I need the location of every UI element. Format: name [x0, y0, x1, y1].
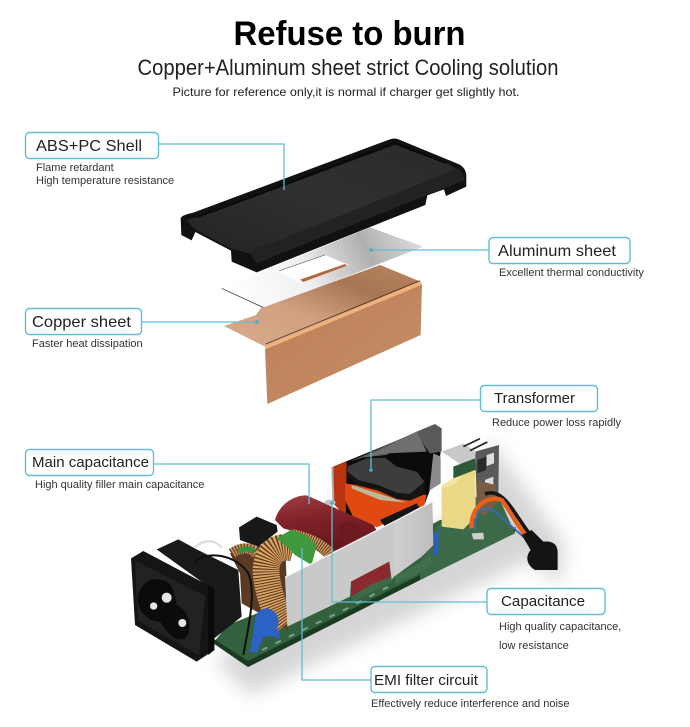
- callout: capacitance: low resistance: [499, 640, 569, 652]
- callout: EMI filter circuit: EMI filter circuit: [374, 672, 479, 689]
- socket body: [157, 539, 242, 638]
- cable strain relief: [522, 530, 558, 570]
- callout: ABS+PC shell: High temperature resistance: [36, 175, 174, 187]
- EMI coils and relay: [230, 517, 331, 630]
- small silver part: [472, 533, 484, 539]
- socket recess: [138, 579, 190, 640]
- callout: transformer: Transformer: [494, 390, 575, 407]
- yellow capacitor: [442, 458, 476, 529]
- callout: EMI filter circuit: [302, 548, 570, 710]
- charger circuit board: [131, 424, 565, 695]
- callout: capacitance: [330, 501, 621, 652]
- exploded cooling assembly: [181, 138, 466, 404]
- grey roof: [350, 424, 442, 491]
- callout: capacitance: High quality capacitance,: [499, 621, 621, 633]
- orange winding: [345, 483, 427, 527]
- disclaimer note: Picture for reference only,it is normal if charger get slightly hot.: [172, 85, 520, 99]
- callout: main capacitance: High quality filler main capacitance: [35, 479, 204, 491]
- callout: capacitance: Capacitance: [501, 593, 585, 610]
- transformer core cap: [347, 458, 425, 501]
- copper sheet: [224, 265, 422, 404]
- callout: aluminum sheet: [369, 238, 644, 279]
- pins: [150, 602, 157, 610]
- callout: copper sheet: Copper sheet: [32, 314, 132, 331]
- title: Refuse to burn: [234, 15, 466, 53]
- callout: transformer: Reduce power loss rapidly: [492, 417, 622, 429]
- wires: [472, 493, 532, 539]
- callout: aluminum sheet: Excellent thermal conductivity: [499, 267, 644, 279]
- board section behind wires: [420, 497, 515, 580]
- cut-out showing capacitor: [351, 562, 391, 597]
- ABS+PC shell: [181, 138, 466, 272]
- small coil: [232, 548, 257, 555]
- blue Y capacitor: [250, 608, 280, 653]
- right coil winding: [292, 535, 331, 565]
- callout: copper sheet: Faster heat dissipation: [32, 338, 143, 350]
- PCB: [213, 518, 516, 667]
- subtitle: Copper+Aluminum sheet strict Cooling solution: [138, 55, 558, 80]
- white wire: [195, 541, 222, 547]
- board with parts below the shield: [394, 557, 433, 583]
- drop shadow: [215, 440, 565, 695]
- aluminum sheet: [222, 227, 423, 308]
- callout: EMI filter circuit: Effectively reduce interference and noise: [371, 698, 570, 710]
- callout: ABS+PC shell: ABS+PC Shell: [36, 138, 142, 155]
- callout: aluminum sheet: Aluminum sheet: [498, 243, 617, 260]
- green core: [277, 529, 317, 565]
- main capacitor: [275, 495, 377, 553]
- rear output end: connector, yellow capacitor, wires: [420, 439, 558, 580]
- toroid winding: [266, 547, 293, 625]
- aluminium shield: [285, 502, 438, 627]
- rear cavity: [333, 425, 441, 520]
- front flange: [131, 551, 214, 662]
- black wire: [193, 555, 252, 655]
- callout: transformer: [369, 386, 622, 472]
- black relay: [239, 517, 278, 547]
- callout: ABS+PC shell: Flame retardant: [36, 162, 114, 174]
- callout: main capacitance: [26, 450, 309, 504]
- black connector behind shield: [380, 503, 419, 527]
- callout: copper sheet: [26, 308, 259, 350]
- callout: ABS+PC shell: [26, 132, 284, 190]
- power inlet socket: [131, 539, 252, 662]
- rear connector: [442, 439, 499, 498]
- red side wall: [333, 462, 347, 517]
- transformer and main capacitor: [275, 424, 442, 553]
- callout: main capacitance: Main capacitance: [32, 454, 149, 471]
- coil backing: [230, 537, 288, 630]
